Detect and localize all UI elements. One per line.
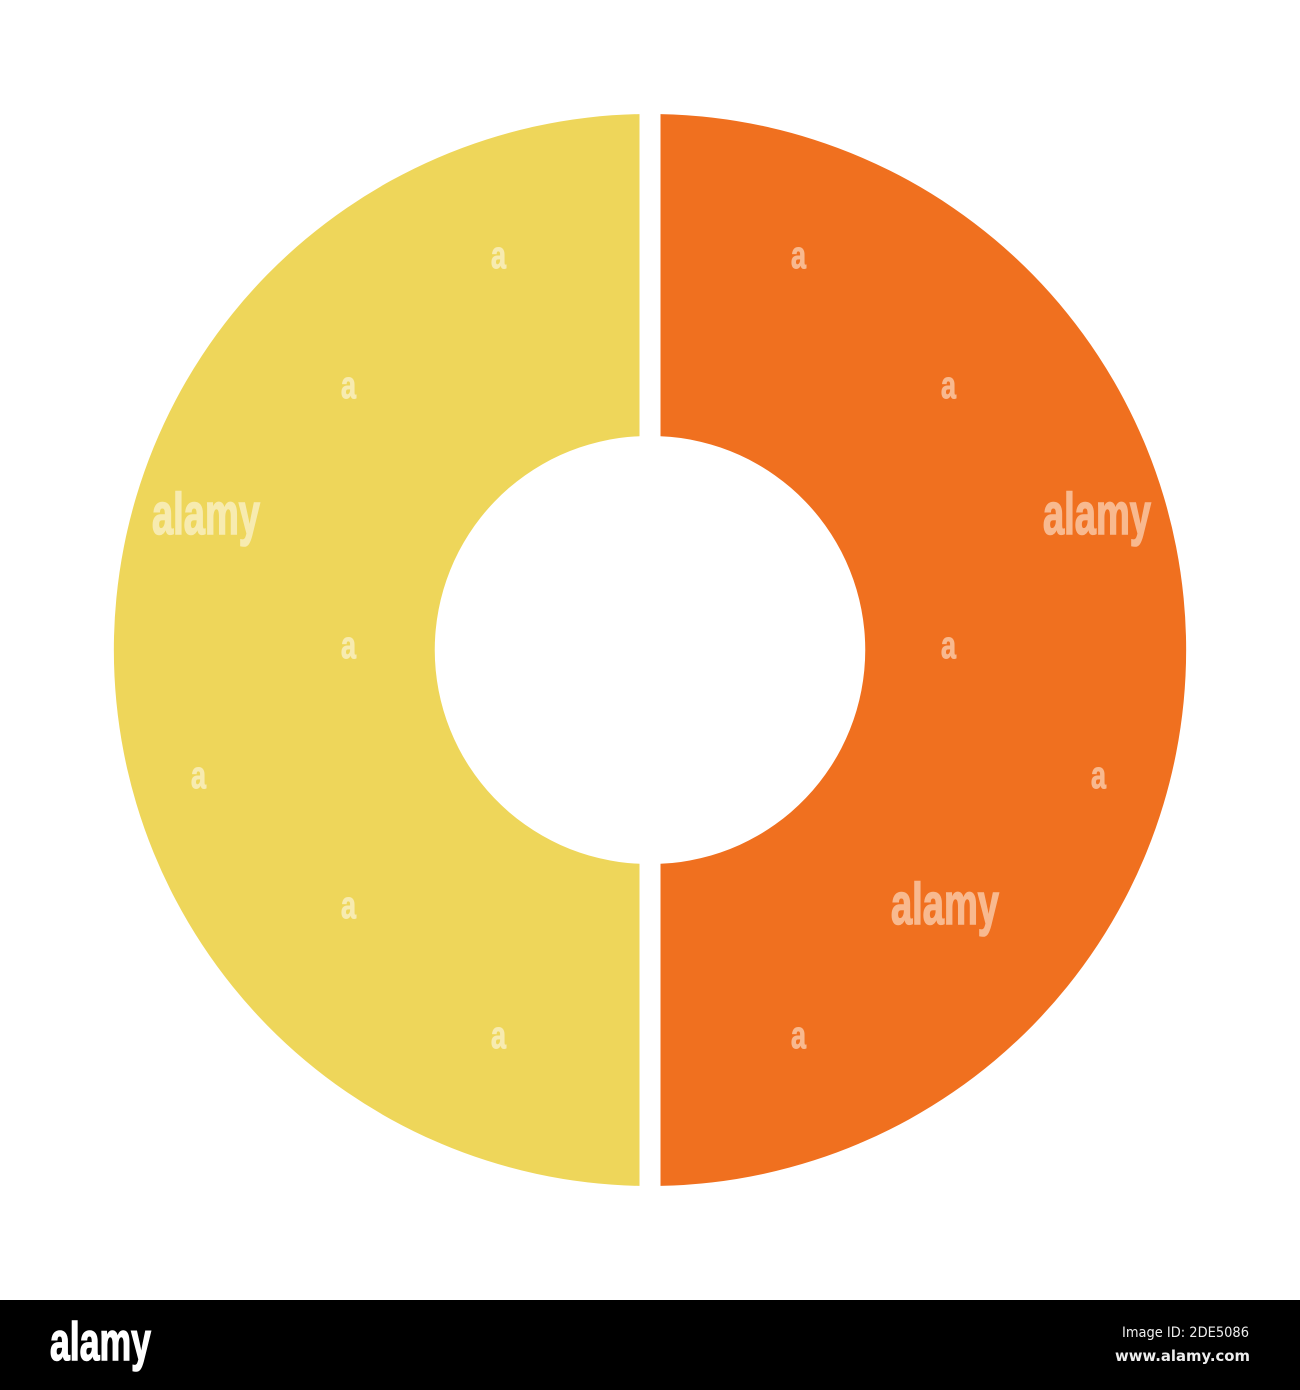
watermarks on yellow segment <box>152 235 507 1057</box>
watermarks on orange segment: a <box>1091 755 1107 797</box>
watermarks on orange segment: a <box>941 365 957 407</box>
watermarks on yellow segment: a <box>491 1015 507 1057</box>
watermarks on yellow segment: a <box>341 365 357 407</box>
watermarks on orange segment <box>791 235 1151 1057</box>
website url: www.alamy.com <box>1115 1347 1250 1365</box>
watermarks on orange segment: a <box>941 625 957 667</box>
donut segment: right orange half <box>660 114 1186 1186</box>
watermarks on orange segment: a <box>791 235 807 277</box>
watermarks on yellow segment: a <box>341 625 357 667</box>
image id: Image ID: 2DE5086 <box>1122 1325 1249 1341</box>
watermarks on yellow segment: alamy <box>152 482 260 547</box>
watermarks on orange segment: alamy <box>891 872 999 937</box>
watermarks on orange segment: alamy <box>1043 482 1151 547</box>
watermarks on yellow segment: a <box>191 755 207 797</box>
watermarks on orange segment: a <box>791 1015 807 1057</box>
footer logo: alamy <box>50 1312 151 1372</box>
watermarks on yellow segment: a <box>341 885 357 927</box>
watermarks on yellow segment: a <box>491 235 507 277</box>
donut segment: left yellow half <box>114 114 640 1186</box>
footer bar <box>0 1300 1300 1390</box>
